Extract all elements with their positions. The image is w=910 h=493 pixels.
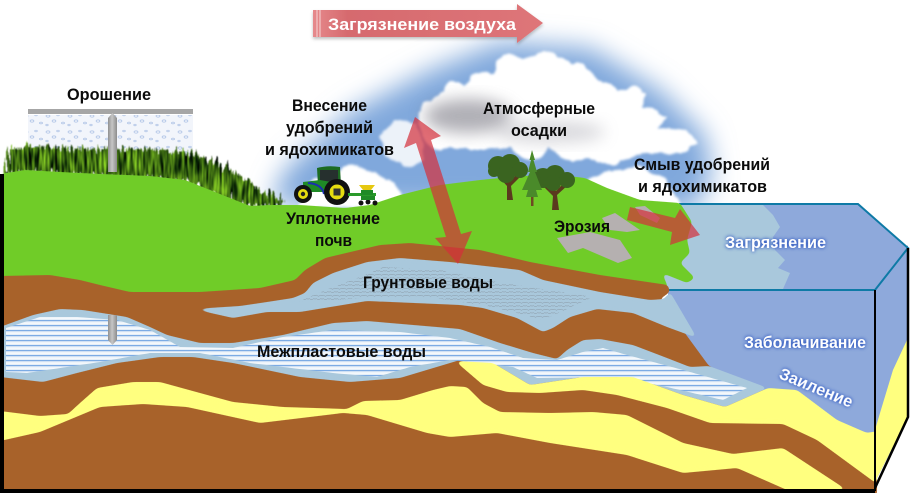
label: fertilizer application: и ядохимикатов bbox=[265, 141, 394, 159]
label: soil compaction bbox=[286, 210, 380, 250]
groundwater layer bbox=[193, 258, 697, 338]
label: runoff bbox=[634, 156, 770, 196]
sand layers: yellow bbox=[0, 361, 877, 490]
grass bbox=[4, 146, 285, 208]
label: precipitation bbox=[483, 100, 595, 140]
label: erosion: Эрозия bbox=[554, 218, 610, 236]
icon: tractor bbox=[294, 166, 378, 206]
label: soil compaction: Уплотнение bbox=[286, 210, 380, 228]
icon: trees bbox=[488, 150, 575, 210]
label: interstratal water: Межпластовые воды bbox=[257, 343, 426, 361]
label: waterlogging: Заболачивание bbox=[744, 334, 866, 352]
label: irrigation: Орошение bbox=[67, 86, 151, 104]
label: precipitation: Атмосферные bbox=[483, 100, 595, 118]
sky with clouds bbox=[270, 42, 712, 210]
irrigation rain bbox=[28, 115, 193, 165]
label: air pollution: Загрязнение воздуха bbox=[328, 15, 517, 34]
arrow: double vertical exchange bbox=[404, 117, 472, 264]
lake: top face with pollution bbox=[652, 204, 908, 290]
groundwater speckle bbox=[297, 267, 593, 320]
box outline: black edges bbox=[2, 174, 908, 491]
soil layers: brown bbox=[0, 243, 877, 493]
label: soil compaction: почв bbox=[315, 232, 352, 250]
arrow: air pollution bbox=[313, 4, 543, 43]
lake: front face bbox=[668, 290, 875, 435]
label: fertilizer application: удобрений bbox=[286, 119, 373, 137]
lake: side face bbox=[875, 245, 908, 482]
interstratal stripes bbox=[6, 317, 747, 400]
interstratal water layer bbox=[0, 309, 768, 407]
label: precipitation: осадки bbox=[511, 122, 567, 140]
well pipe underground bbox=[108, 315, 117, 345]
label: fertilizer application: Внесение bbox=[292, 97, 367, 115]
label: fertilizer application bbox=[265, 97, 394, 159]
label: siltation: Заиление bbox=[776, 365, 855, 412]
sand on side face bbox=[875, 340, 908, 482]
label: runoff: Смыв удобрений bbox=[634, 156, 770, 174]
label: pollution: Загрязнение bbox=[725, 234, 826, 252]
erosion patches bbox=[557, 206, 660, 263]
irrigation sprinkler bbox=[28, 109, 193, 172]
label: groundwater: Грунтовые воды bbox=[363, 274, 493, 292]
surface: green land bbox=[0, 170, 695, 302]
arrow: runoff into lake bbox=[627, 207, 700, 245]
label: runoff: и ядохимикатов bbox=[638, 178, 767, 196]
